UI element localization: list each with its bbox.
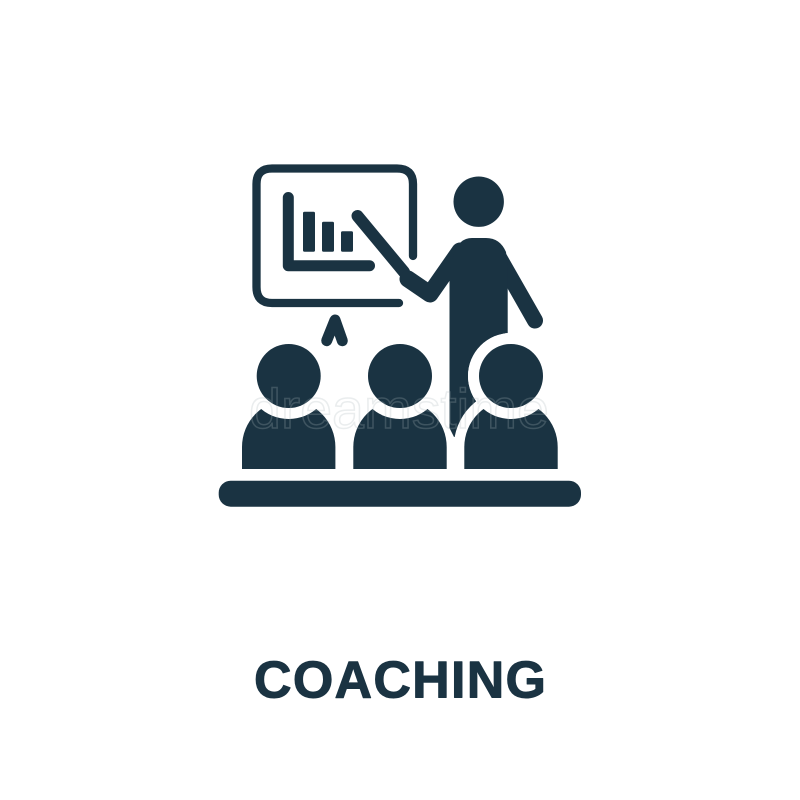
icon: coach figure [358, 176, 535, 438]
coach pointing arm [408, 251, 460, 294]
audience member left [242, 333, 335, 469]
arrow up to the board [327, 320, 342, 341]
audience member middle [353, 333, 447, 469]
watermark: dreamstime [249, 377, 549, 440]
coach pointer [358, 216, 404, 272]
icon: presentation board with chart [256, 168, 413, 303]
table [219, 481, 581, 507]
title: COACHING [254, 652, 546, 710]
coach raised arm [498, 256, 535, 320]
chart axes [288, 198, 370, 266]
audience member right [464, 333, 558, 469]
coach head [454, 176, 504, 227]
audience person cut-out around coach [440, 333, 558, 481]
coach torso [450, 238, 508, 438]
board frame [256, 168, 413, 303]
chart bars [303, 212, 353, 252]
